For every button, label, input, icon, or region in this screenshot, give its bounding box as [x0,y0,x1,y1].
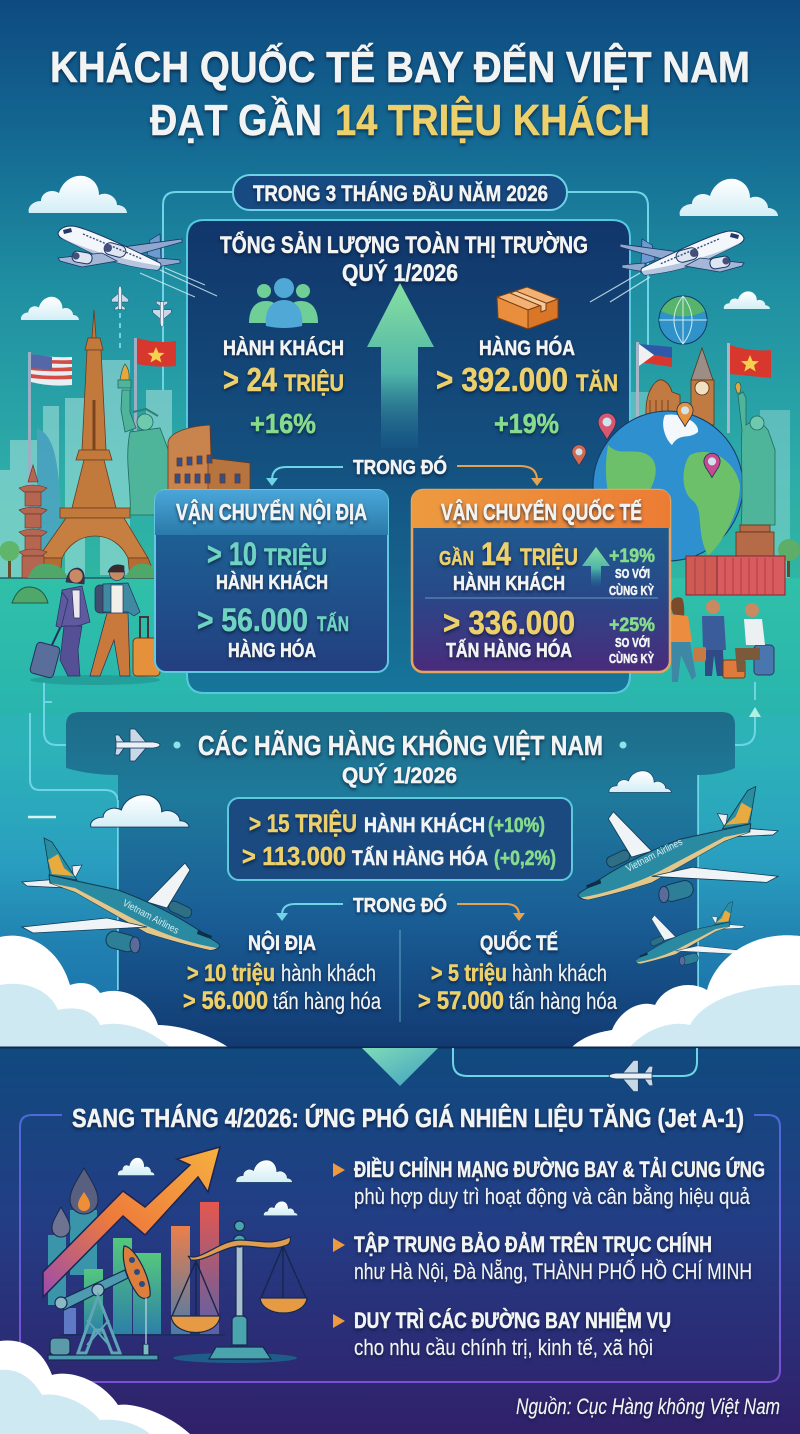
decorative skyline left [0,360,172,580]
growth arrow [367,283,434,448]
seated man [735,603,765,672]
oil pump [48,1246,158,1360]
tree and shrubs [0,541,158,603]
column: domestic airlines [183,931,381,1015]
stat: domestic cargo: TẤN [317,613,349,636]
icon: VNA plane left: Vietnam Airlines [121,898,180,937]
panel: international [412,490,670,672]
cloud bottom left [0,1340,190,1434]
icon: down triangle [362,1048,438,1086]
stat: change 19: CÙNG KỲ [609,583,654,598]
bars [48,1202,225,1336]
connector lines [30,192,755,1000]
Big Ben [691,348,714,425]
decorative dash [28,816,56,818]
cloud left [0,936,228,1047]
heading: VẬN CHUYỂN QUỐC TẾ [441,498,642,525]
pins [572,402,720,478]
cargo stat: TĂN [576,369,618,397]
label: trong do 2: TRONG ĐÓ [353,893,447,917]
column: domestic airlines: tấn hàng hóa [273,988,381,1014]
title [50,41,750,145]
heading [198,729,603,788]
heading: CÁC HÃNG HÀNG KHÔNG VIỆT NAM [198,729,603,761]
panel: outlook April [0,1047,800,1434]
VN flag right [727,343,771,433]
cargo stat: > 392.000 [436,361,568,398]
stat: domestic passengers: TRIỆU [264,543,327,571]
column: international airlines: > 57.000 [418,987,504,1015]
column: international airlines: QUỐC TẾ [480,931,558,955]
Eiffel tower [34,310,156,578]
clouds top [21,176,778,320]
woman [56,568,90,676]
clouds [118,1158,298,1216]
cargo stat [436,336,618,439]
column: international airlines: tấn hàng hóa [509,988,617,1014]
stat: international passengers [439,536,578,595]
heading: total market: TỔNG SẢN LƯỢNG TOÀN THỊ TRƯỜNG [220,230,588,259]
column: international airlines [418,931,617,1015]
label: trong do arrows: TRONG ĐÓ [353,455,447,479]
column: domestic airlines: NỘI ĐỊA [248,931,316,955]
panel: total market [187,220,630,693]
orange suitcase [133,617,160,676]
stat: international cargo: > 336.000 [443,604,575,641]
blue suitcase [29,628,61,679]
stat: domestic cargo [197,602,349,662]
title: ĐẠT GẦN [150,95,322,145]
Colosseum [168,425,250,490]
column: domestic airlines: hành khách [281,960,376,986]
stat: international passengers: GẦN [439,547,474,570]
stat box: TẤN HÀNG HÓA [352,846,488,870]
drops [52,1168,98,1237]
icon: small planes [111,286,171,327]
column: international airlines: > 5 triệu [431,960,507,987]
passengers stat: +16% [250,408,316,439]
stat: domestic cargo: HÀNG HÓA [228,638,316,662]
man [702,600,726,676]
stat box: HÀNH KHÁCH [364,814,485,837]
stat: domestic passengers: HÀNH KHÁCH [216,571,328,594]
luggage [693,645,774,678]
connector dots [174,742,626,748]
pill: period: TRONG 3 THÁNG ĐẦU NĂM 2026 [253,181,548,206]
heading: VẬN CHUYỂN NỘI ĐỊA [176,498,367,525]
Statue of Liberty [118,364,174,515]
Statue right [735,382,775,525]
stat: change 19: SO VỚI [615,566,650,581]
stat: domestic cargo: > 56.000 [197,602,308,638]
passengers stat: > 24 [223,361,278,398]
clouds mid [91,771,671,827]
panel: Vietnamese airlines [66,712,735,1047]
icon: mini plane bottom [609,1060,653,1092]
Philippines flag [636,342,672,422]
icon: VNA plane small [635,901,745,966]
cloud right [572,935,800,1047]
man [90,565,140,676]
containers [686,556,785,595]
VN flag [134,338,176,508]
woman [669,597,696,682]
icon: VNA plane right [578,786,778,903]
dome [646,380,680,420]
frame [20,1115,780,1382]
stat box: > 15 TRIỆU [249,808,357,838]
passengers stat: TRIỆU [284,369,344,397]
illustration: right landmarks and globe [572,296,800,595]
bullet three: DUY TRÌ CÁC ĐƯỜNG BAY NHIỆM VỤ [354,1308,671,1333]
US flag [28,352,72,577]
bullet three [333,1308,671,1360]
stat: international cargo [443,604,575,662]
rising arrow [43,1147,220,1297]
stat box: (+0,2%) [494,847,556,870]
icon: passengers [249,278,318,328]
title: 14 TRIỆU KHÁCH [335,95,650,145]
globe small [659,296,707,344]
stat: change 25: +25% [609,615,655,636]
stat: domestic passengers [207,536,328,594]
illustration: travellers left [29,565,160,685]
passengers stat: HÀNH KHÁCH [223,337,344,360]
bullet one [333,1157,765,1209]
panel: domestic [155,490,388,672]
Big globe [593,411,743,561]
icon: mini plane [115,729,160,761]
stat: international passengers: 14 [481,536,511,572]
stat: change 19 [609,546,655,598]
column: domestic airlines: > 10 triệu [187,960,275,987]
icon: plane top right [590,231,744,302]
side connector [118,775,698,1000]
stat: change 25: SO VỚI [615,635,650,650]
icon: plane top left [58,226,217,297]
connector bottom [453,1048,697,1076]
icon: arrow head up [749,707,761,717]
pedestal [736,525,774,556]
stat: change 19: +19% [609,546,655,567]
icon: VNA plane right: Vietnam Airlines [624,837,685,875]
stat: change 25: CÙNG KỲ [609,651,654,666]
cargo stat: +19% [494,408,559,439]
stat: domestic passengers: > 10 [207,536,257,572]
icon: green arrow [582,547,610,586]
bullet three: cho nhu cầu chính trị, kinh tế, xã hội [354,1335,653,1360]
label: trong do arrows [266,455,543,486]
illustration: travellers right [669,597,774,682]
label: trong do 2 [276,893,525,921]
pagoda [19,465,47,578]
stat: international cargo: TẤN HÀNG HÓA [446,638,572,662]
column: domestic airlines: > 56.000 [183,987,268,1015]
bullet two: TẬP TRUNG BẢO ĐẢM TRÊN TRỤC CHÍNH [354,1232,712,1257]
stat: change 25 [609,615,655,666]
stat: international passengers: TRIỆU [520,543,578,571]
icon: VNA plane left [22,838,220,954]
stat: international passengers: HÀNH KHÁCH [453,572,565,595]
stat box: (+10%) [488,814,545,837]
heading: total market: QUÝ 1/2026 [342,259,458,287]
tree [778,539,800,577]
stat box: > 113.000 [242,841,346,871]
bullet two [333,1232,752,1284]
heading: QUÝ 1/2026 [342,763,457,788]
passengers stat [223,337,344,439]
illustration: fuel chart [43,1147,307,1363]
icon: cargo box [497,287,558,329]
heading: total market [220,230,588,287]
balance scale [171,1221,307,1363]
cargo stat: HÀNG HÓA [479,336,575,360]
pill: period [233,175,567,210]
illustration: left landmarks [0,310,250,603]
stat box [228,798,572,880]
column: international airlines: hành khách [512,960,607,986]
